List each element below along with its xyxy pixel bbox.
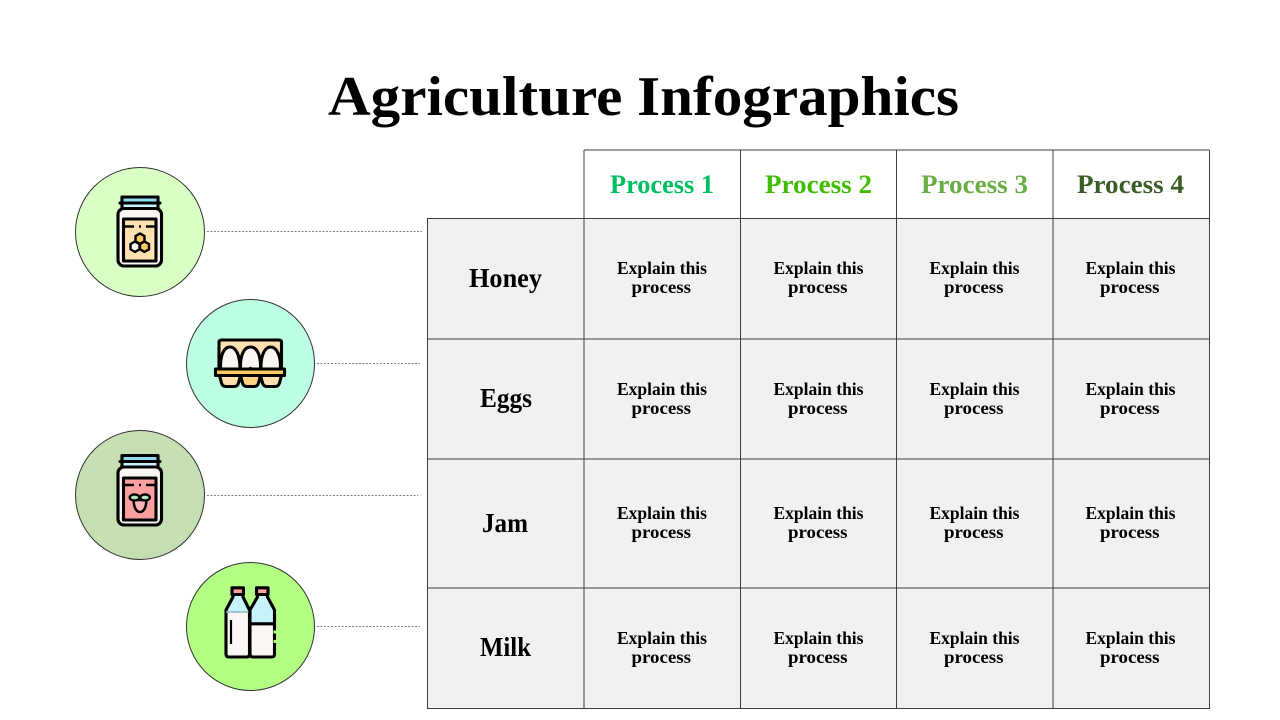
row 1 cell text: Explain this	[617, 258, 707, 278]
row 4 cell text: process	[632, 647, 691, 667]
row 4 cell text: process	[1100, 647, 1160, 667]
row 4 cell text: process	[788, 647, 848, 667]
row 1 cell text: Explain this	[774, 258, 864, 278]
row 1 cell text: process	[632, 277, 691, 297]
circle: milk	[186, 562, 314, 690]
row labels: Eggs	[480, 383, 532, 413]
row labels: Honey	[469, 263, 542, 293]
row 3 cell text: process	[1100, 522, 1160, 542]
column headings: Process 3	[921, 170, 1028, 199]
row 4 cell text: process	[944, 647, 1004, 667]
row 2 cell text: Explain this	[930, 379, 1020, 399]
circle: eggs	[186, 300, 314, 428]
icon: jam jar	[118, 455, 162, 525]
row 2 cell text: process	[632, 398, 691, 418]
icon: egg carton	[216, 340, 284, 386]
row 3 cell text: Explain this	[1086, 503, 1176, 523]
column headings	[610, 170, 1184, 199]
row 1 cell text: process	[1100, 277, 1160, 297]
table	[427, 150, 1210, 709]
row 2 cell text	[617, 379, 1176, 418]
column headings: Process 4	[1077, 170, 1184, 199]
row 1 cell text: process	[788, 277, 848, 297]
title: Agriculture Infographics	[328, 66, 959, 128]
row 1 cell text: Explain this	[1086, 258, 1176, 278]
row labels: Jam	[482, 508, 528, 538]
row 3 cell text: process	[944, 522, 1004, 542]
column headings: Process 2	[765, 170, 872, 199]
row 1 cell text: process	[944, 277, 1004, 297]
column headings: Process 1	[610, 170, 714, 199]
row 1 cell text	[617, 258, 1176, 297]
row 4 cell text: Explain this	[617, 628, 707, 648]
circle: honey	[76, 168, 204, 296]
row 3 cell text: process	[788, 522, 848, 542]
row 4 cell text: Explain this	[930, 628, 1020, 648]
icon: milk bottles	[226, 588, 277, 657]
row labels	[469, 263, 542, 662]
row 2 cell text: process	[788, 398, 848, 418]
row 2 cell text: Explain this	[1086, 379, 1176, 399]
row 1 cell text: Explain this	[930, 258, 1020, 278]
row 3 cell text	[617, 503, 1176, 542]
row 2 cell text: Explain this	[617, 379, 707, 399]
row 2 cell text: process	[1100, 398, 1160, 418]
row 4 cell text	[617, 628, 1176, 667]
row 4 cell text: Explain this	[774, 628, 864, 648]
row 3 cell text: Explain this	[930, 503, 1020, 523]
row labels: Milk	[480, 632, 531, 662]
circle: jam	[76, 430, 204, 560]
row 4 cell text: Explain this	[1086, 628, 1176, 648]
row 3 cell text: process	[632, 522, 691, 542]
icon: honey jar	[118, 196, 162, 266]
row 3 cell text: Explain this	[617, 503, 707, 523]
row 2 cell text: process	[944, 398, 1004, 418]
row 2 cell text: Explain this	[774, 379, 864, 399]
row 3 cell text: Explain this	[774, 503, 864, 523]
